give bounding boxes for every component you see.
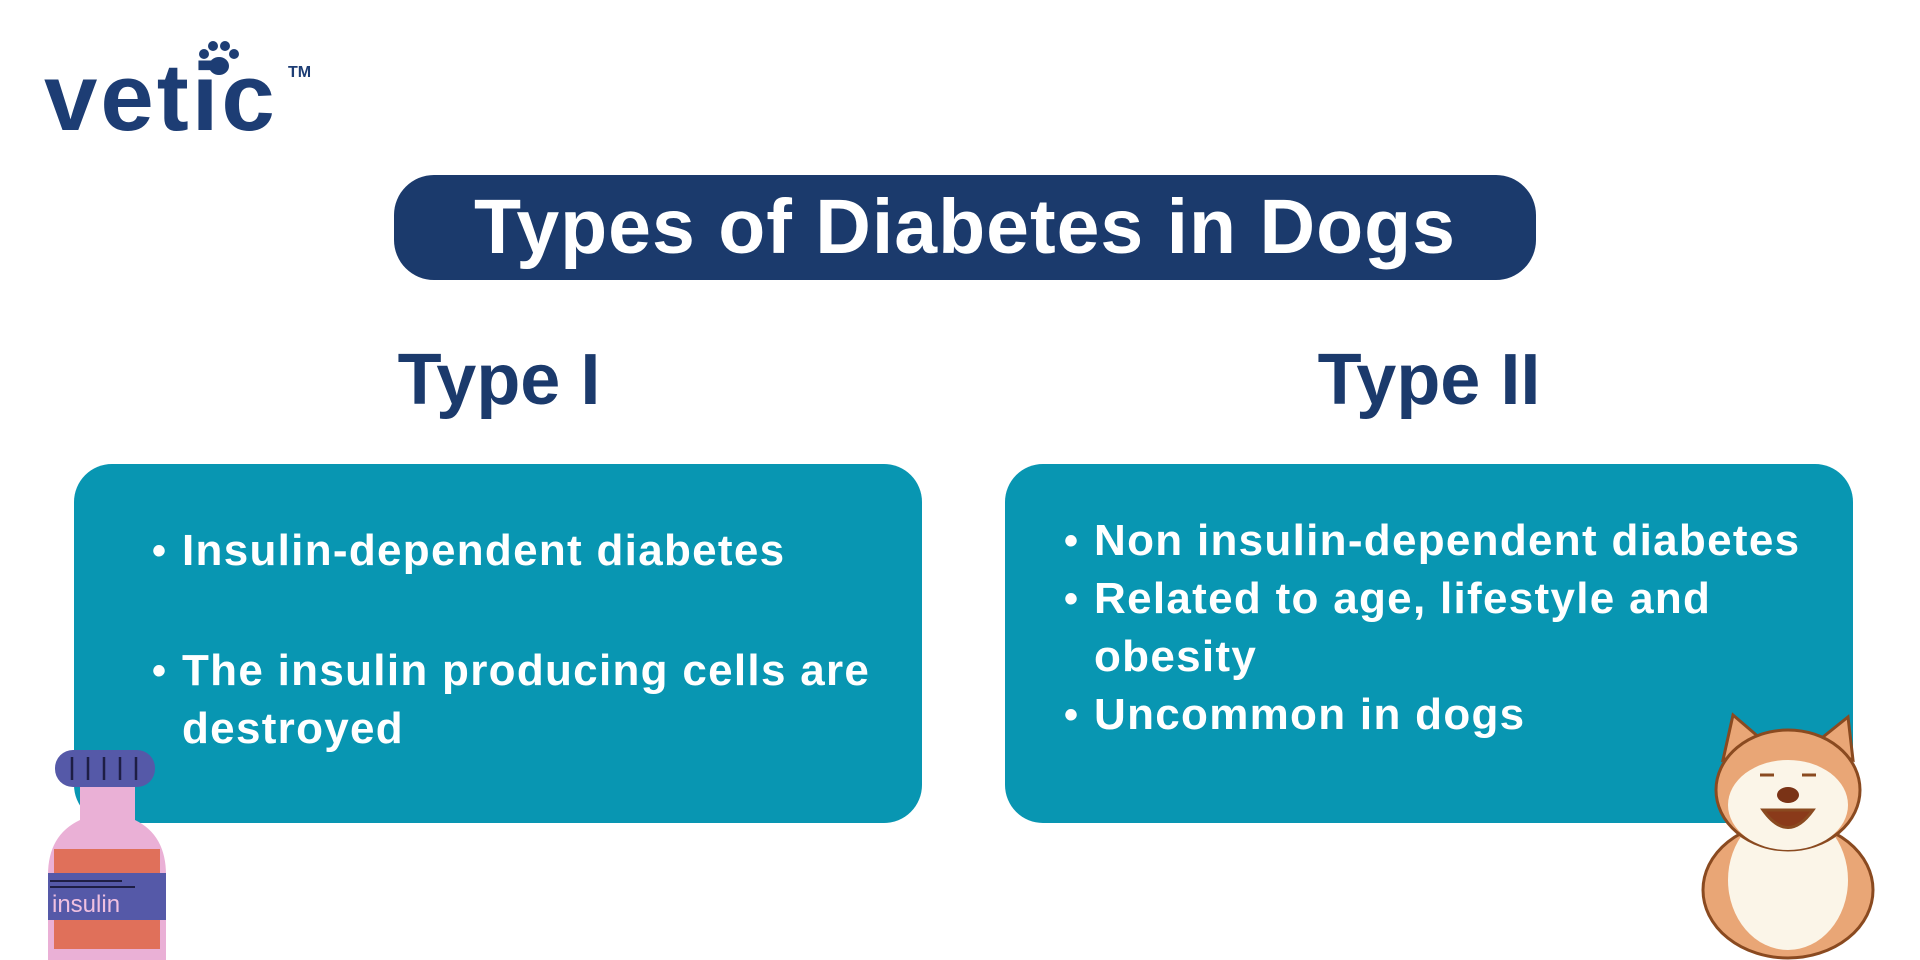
logo: vetic <box>44 44 278 151</box>
panel: type II: • <box>1064 693 1079 737</box>
bullets: obesity <box>1094 632 1257 681</box>
bullet: Insulin-dependent diabetes <box>182 526 785 575</box>
bullet <box>152 646 870 753</box>
title: Types of Diabetes in Dogs <box>474 184 1456 270</box>
panel: type II: • <box>1064 577 1079 621</box>
heading: Type II: Type II <box>1318 340 1540 420</box>
bullets <box>1064 516 1800 739</box>
panel: type II: • <box>1064 519 1079 563</box>
panel: type I <box>74 464 922 823</box>
panel: type I: • <box>152 649 167 693</box>
bullet: The insulin producing cells are <box>182 646 870 695</box>
panel: type I: • <box>152 529 167 573</box>
heading: Type I: Type I <box>398 340 600 420</box>
bullets: Uncommon in dogs <box>1094 690 1525 739</box>
bullets: Related to age, lifestyle and <box>1094 574 1711 623</box>
bullet: destroyed <box>182 704 404 753</box>
panel: type II <box>1005 464 1853 823</box>
icon: insulin bottle: insulin <box>52 891 120 918</box>
icon: insulin bottle <box>48 750 166 960</box>
logo: TM <box>288 64 311 81</box>
bullets: Non insulin-dependent diabetes <box>1094 516 1800 565</box>
icon: dog <box>1702 712 1874 960</box>
